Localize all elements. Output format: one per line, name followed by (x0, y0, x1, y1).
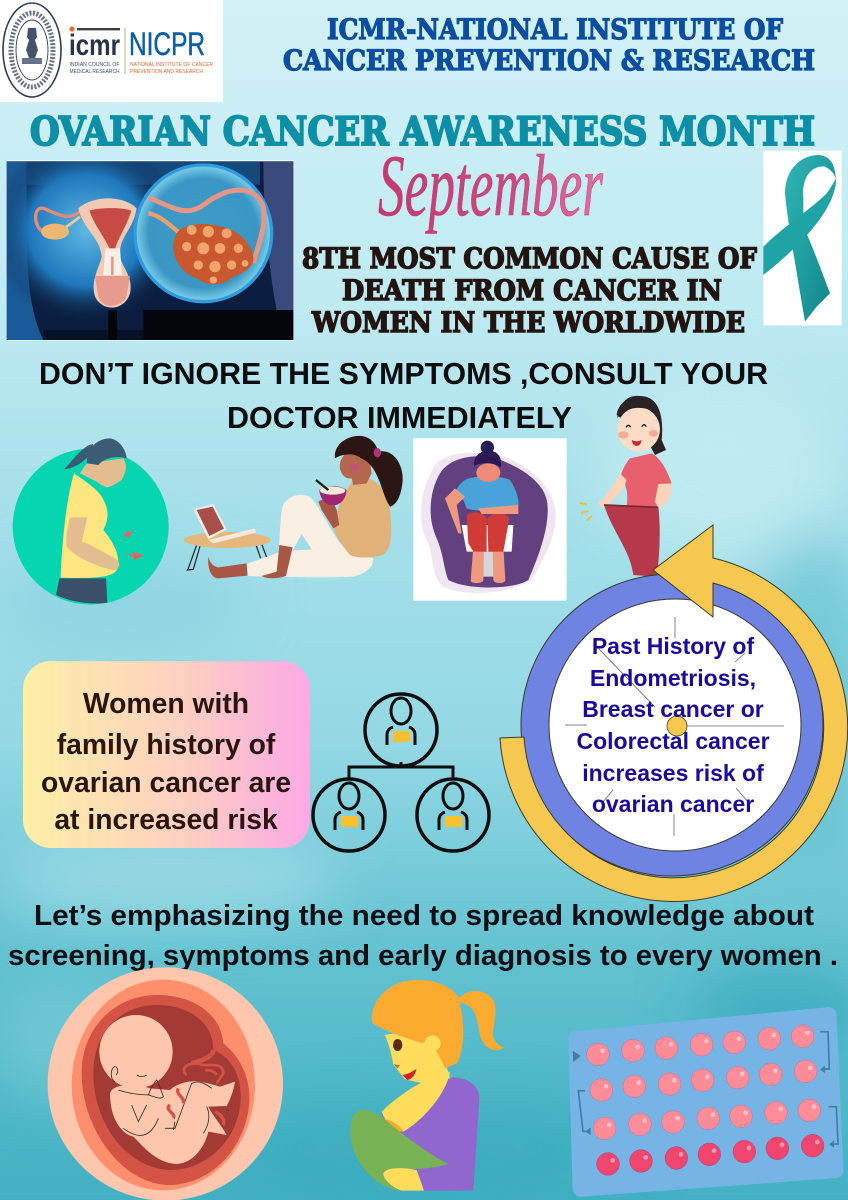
script: September: September (378, 138, 603, 235)
callout: family history (23, 661, 310, 848)
icon: woman with abdominal pain (13, 438, 169, 605)
icon: fetus in womb (48, 967, 283, 1200)
text: past history risk: Past History of (592, 633, 754, 659)
text: past history risk (576, 633, 770, 817)
NICPR wordmark (124, 26, 213, 75)
callout: family history: family history of (57, 728, 276, 760)
symptoms heading (39, 357, 768, 435)
icmr wordmark: MEDICAL RESEARCH (70, 69, 120, 75)
NICPR wordmark: PREVENTION AND RESEARCH (130, 69, 203, 75)
callout: family history: Women with (83, 687, 249, 719)
icon: birth control pill pack (568, 1007, 843, 1197)
icmr wordmark (69, 26, 120, 75)
NICPR wordmark: NICPR (129, 26, 205, 62)
magnifier lens (135, 165, 272, 302)
risk circle spokes (565, 617, 784, 836)
awareness message: Let’s emphasizing the need to spread knowledge about (34, 900, 814, 932)
text: past history risk: Breast cancer or (582, 696, 764, 722)
icon: teal awareness ribbon (763, 151, 842, 325)
statistic text (302, 242, 757, 339)
statistic text: DEATH FROM CANCER IN (342, 274, 722, 307)
icon: woman eating beside laptop (184, 436, 403, 578)
low table with laptop (184, 504, 271, 570)
logo panel (0, 0, 223, 102)
icmr wordmark: icmr (69, 29, 120, 62)
text: past history risk: Endometriosis, (590, 665, 756, 691)
icon: woman showing weight loss (579, 396, 672, 577)
institute heading (283, 13, 815, 77)
icmr wordmark: INDIAN COUNCIL OF (70, 62, 120, 68)
statistic text: WOMEN IN THE WORLDWIDE (311, 306, 745, 339)
institute heading: ICMR-NATIONAL INSTITUTE OF (327, 13, 783, 46)
uterus (36, 198, 137, 308)
icon: ICMR seal (3, 3, 61, 97)
callout: family history: ovarian cancer are (41, 766, 291, 798)
text: past history risk: Colorectal cancer (576, 728, 770, 754)
awareness message: screening, symptoms and early diagnosis to every women . (8, 940, 838, 972)
symptoms heading: DOCTOR IMMEDIATELY (227, 401, 572, 435)
text: past history risk: ovarian cancer (592, 791, 754, 817)
NICPR wordmark: NATIONAL INSTITUTE OF CANCER (130, 62, 213, 68)
statistic text: 8TH MOST COMMON CAUSE OF (302, 242, 757, 275)
icon: woman on toilet (413, 438, 567, 601)
icon: breastfeeding mother (350, 980, 505, 1191)
icon: family tree (313, 694, 489, 851)
icon: circular risk arrow (500, 525, 848, 901)
illustration: uterus and ovarian tumour (6, 160, 294, 341)
awareness message (8, 900, 838, 972)
callout: family history: at increased risk (54, 803, 278, 835)
text: past history risk: increases risk of (582, 760, 764, 786)
symptoms heading: DON’T IGNORE THE SYMPTOMS ,CONSULT YOUR (39, 357, 768, 391)
